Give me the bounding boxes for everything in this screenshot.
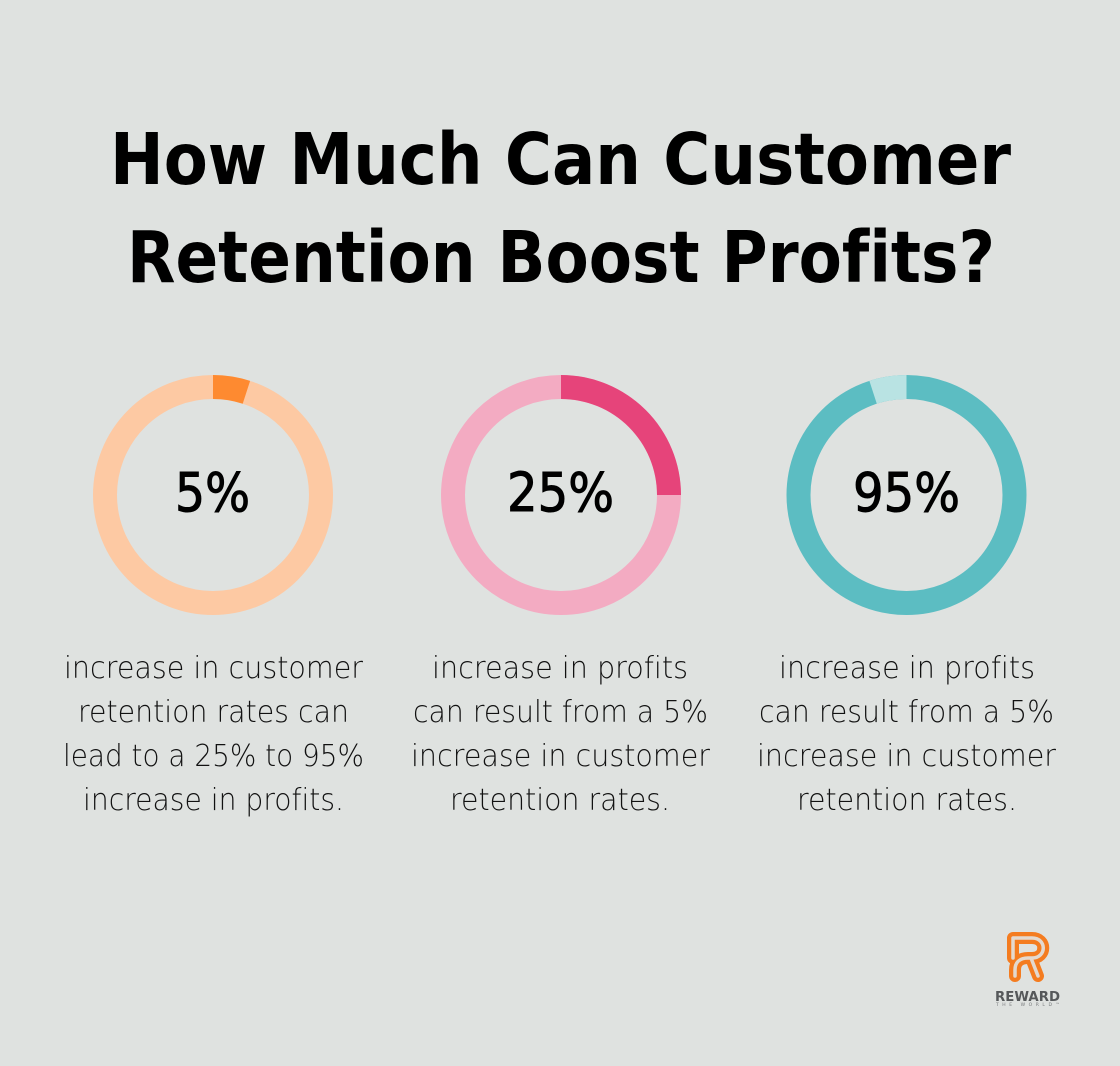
tagline: THE WORLD™ [995,1002,1060,1008]
description: 95%: can result from a 5% [759,695,1054,730]
panel: 5% stat [63,375,374,818]
description: 5%: retention rates can [78,695,349,730]
description: 25%: can result from a 5% [413,695,708,730]
donut chart: 25% [453,375,681,603]
description: 95%: increase in customer [757,739,1057,774]
donut chart: 5% [105,375,321,603]
donut chart: 95% [798,375,1014,603]
description: 25%: retention rates. [450,783,670,818]
logo: Reward the World [995,938,1060,1008]
panel: 25% stat [411,375,720,818]
description: 5%: increase in profits. [83,783,344,818]
wordmark: REWARD [995,990,1060,1005]
value: 95%: 95% [853,461,960,524]
panel: 95% stat [757,375,1066,818]
title: Retention Boost Profits? [127,216,995,299]
title [110,118,1011,299]
value: 25%: 25% [507,461,614,524]
icon: R mark [1013,938,1043,976]
description: 95%: retention rates. [797,783,1017,818]
description: 95%: increase in profits [779,651,1035,686]
description: 5%: lead to a 25% to 95% [63,739,364,774]
description: 5%: increase in customer [64,651,364,686]
description: 25%: increase in customer [411,739,711,774]
title: How Much Can Customer [110,118,1011,201]
value: 5%: 5% [175,461,250,524]
description: 25%: increase in profits [432,651,688,686]
